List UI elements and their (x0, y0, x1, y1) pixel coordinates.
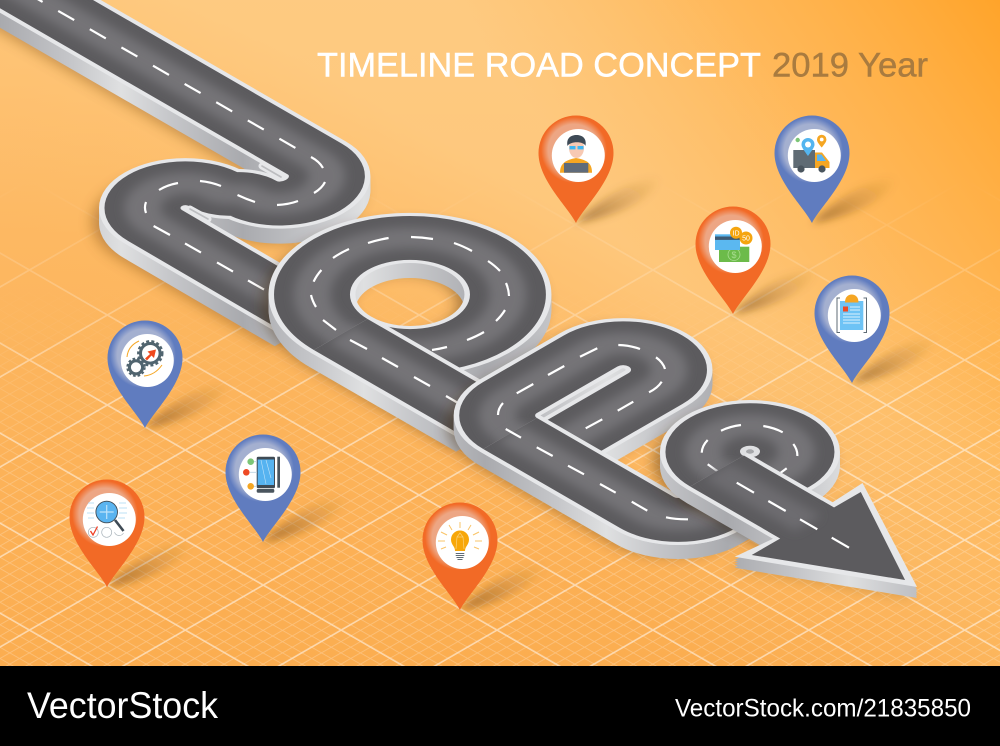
road: digit 1 (472, 332, 822, 544)
pin: person with laptop (538, 115, 660, 223)
road: arrow strand and head (717, 471, 980, 625)
footer bar (0, 666, 1000, 746)
icon: person (560, 135, 592, 173)
icon: money (715, 227, 752, 262)
title (317, 47, 928, 85)
icon: money: $ (731, 250, 737, 260)
icon: clipboard (837, 294, 866, 332)
icon: bulb (438, 522, 482, 560)
pin: delivery truck (774, 115, 896, 223)
title: main words: TIMELINE ROAD CONCEPT (317, 47, 761, 85)
pin: clipboard (814, 276, 936, 383)
footer: image id: VectorStock.com/21835850 (675, 694, 971, 722)
pin: smartphone (226, 434, 347, 542)
pin: gears (108, 320, 229, 428)
icon: phone (243, 457, 280, 493)
pin: light bulb (422, 502, 544, 610)
road: digit 0 ring (264, 214, 625, 434)
footer: brand: VectorStock (27, 685, 218, 726)
road: digit 1 long strand (506, 389, 755, 530)
pin: magnifier and checklist (70, 480, 191, 587)
road: digit 9 with arrowhead (677, 414, 980, 636)
icon: gears (127, 341, 162, 376)
icon: money: ID (732, 230, 740, 237)
title: year: 2019 Year (772, 47, 928, 85)
icon: money: 50 (742, 236, 750, 243)
icon: magnifier (87, 501, 127, 537)
road: digit 2 (0, 0, 444, 329)
pin: card and money (696, 206, 817, 314)
icon: truck (793, 135, 830, 173)
road: digit 0 lower strand (323, 320, 487, 419)
